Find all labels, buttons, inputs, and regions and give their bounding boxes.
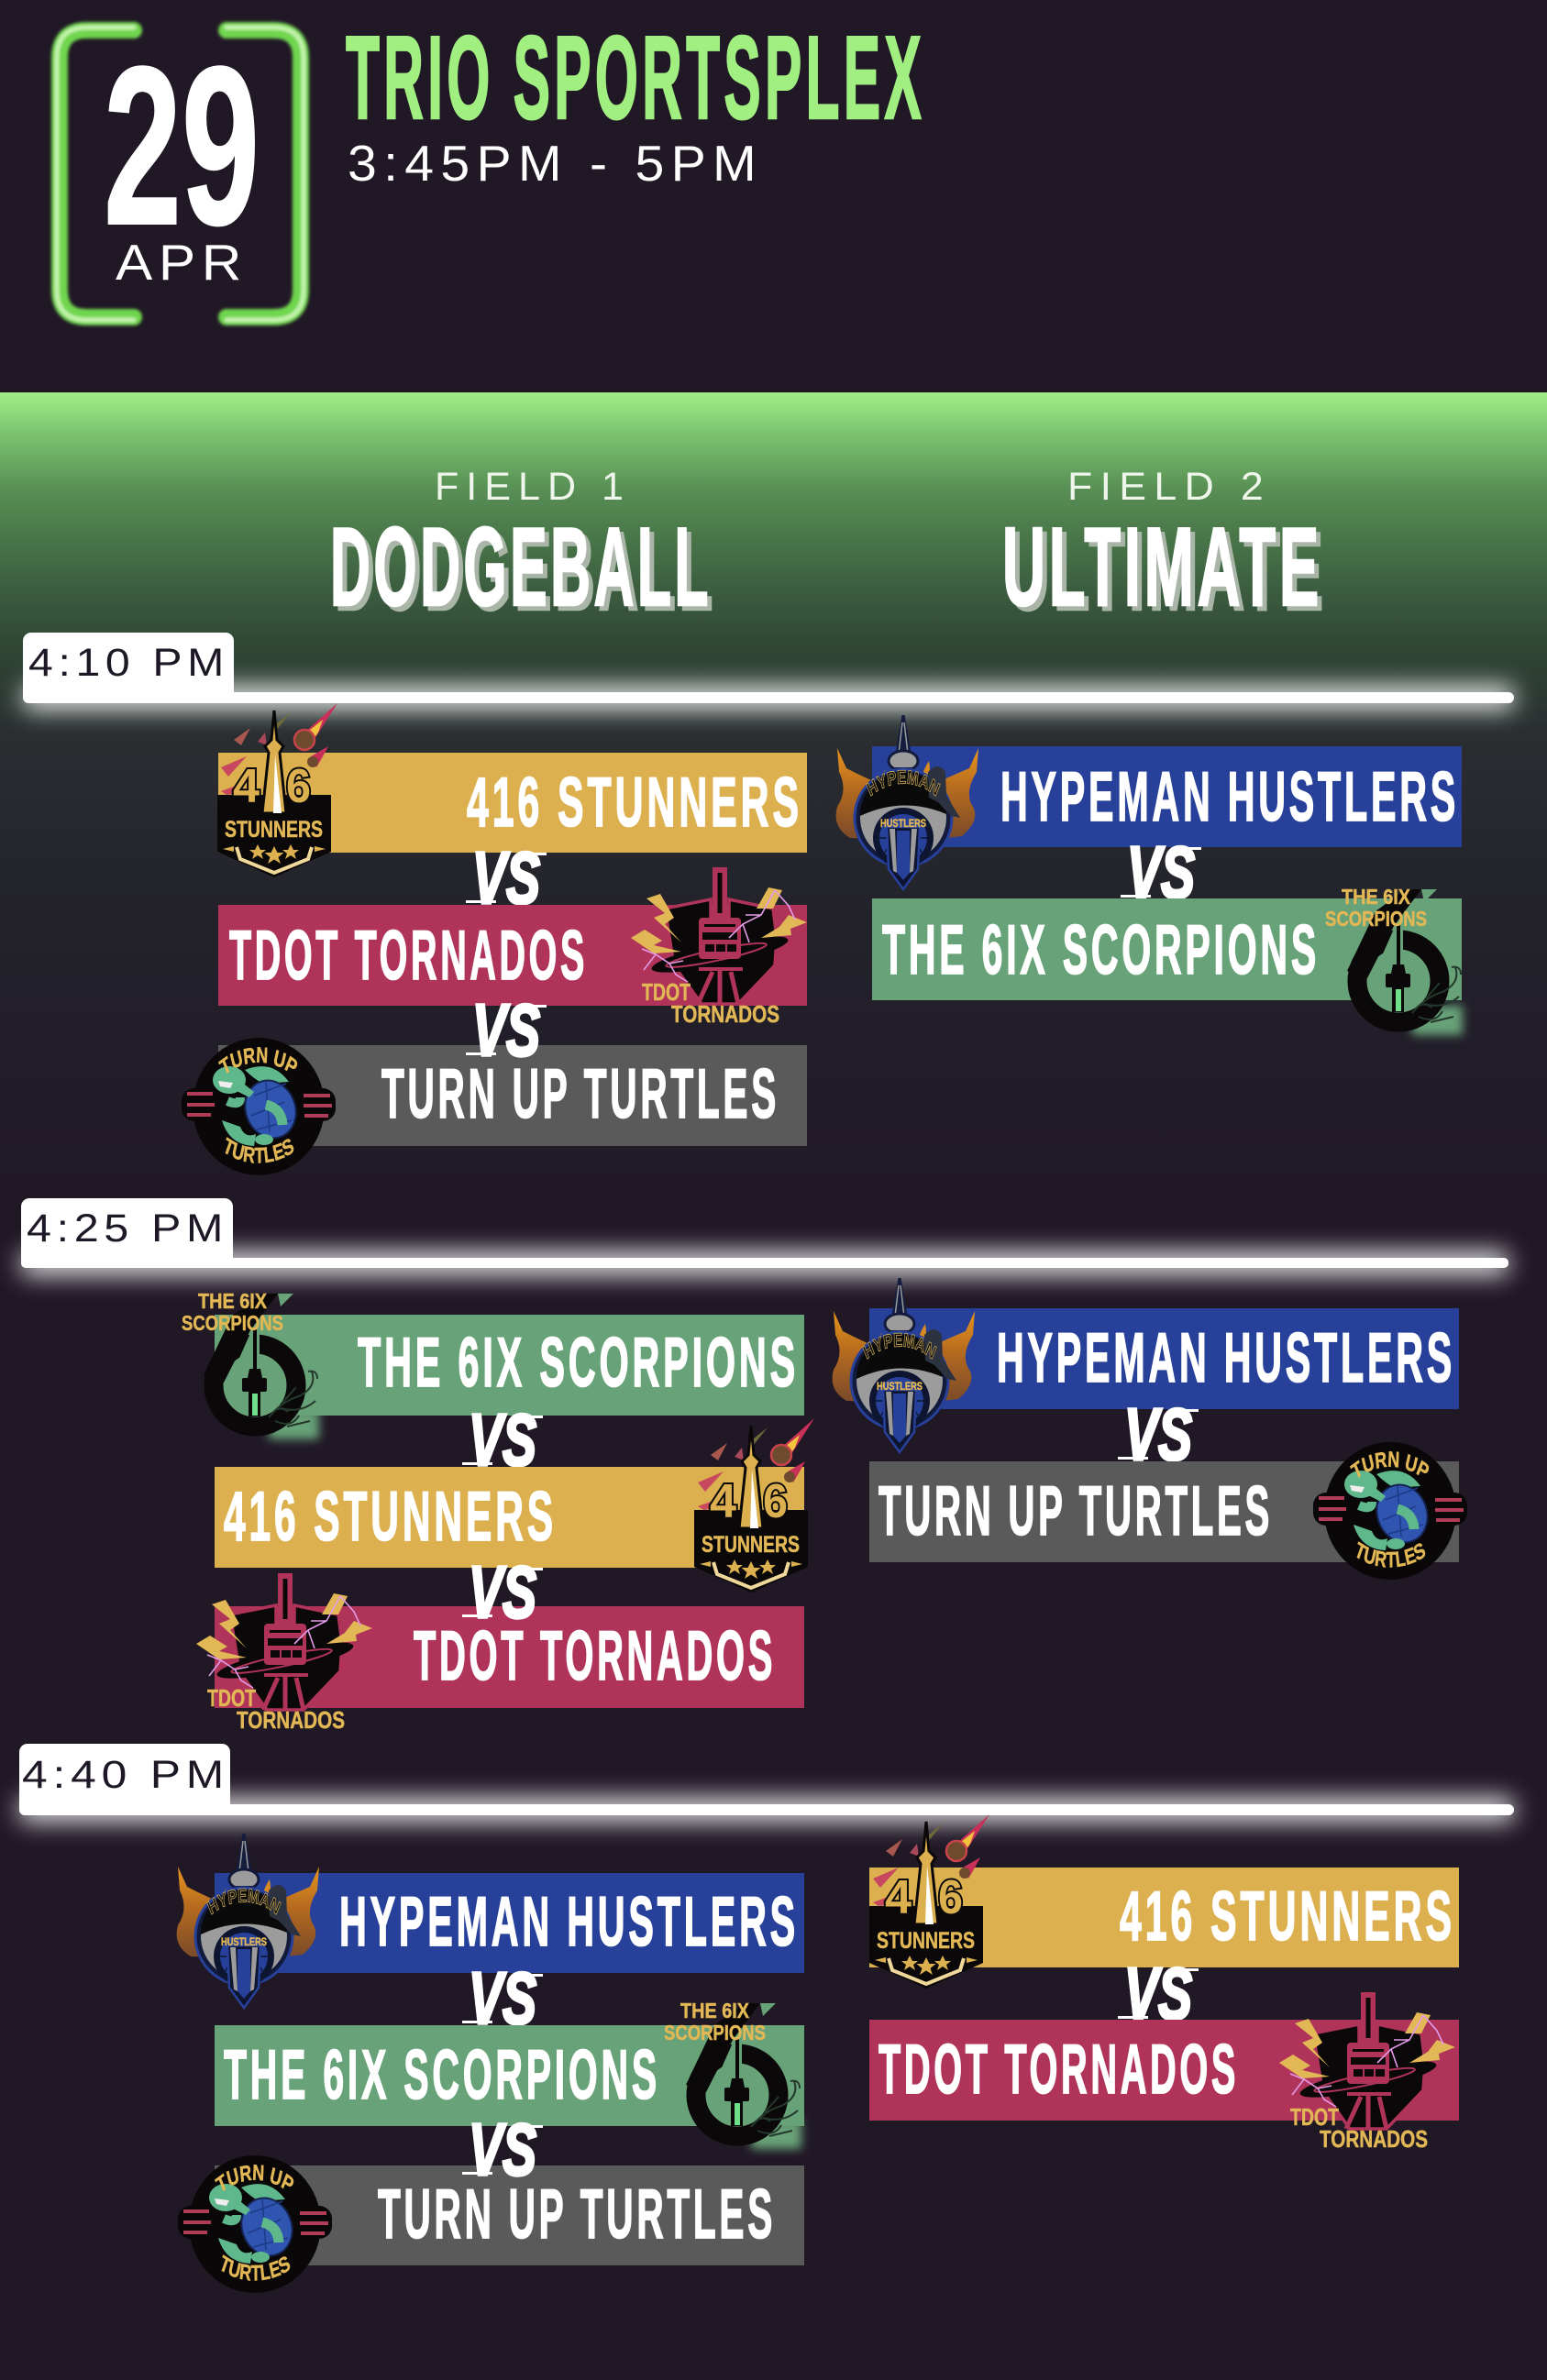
logo: TDOT Tornados: TDOT — [207, 1684, 256, 1712]
logo: 416 Stunners — [217, 703, 337, 877]
logo: Turn Up Turtles — [1313, 1442, 1467, 1580]
logo: The 6ix Scorpions: THE 6IX — [680, 1999, 750, 2022]
logo: The 6ix Scorpions — [1325, 885, 1463, 1035]
bar: Turn Up Turtles: TURN UP TURTLES — [381, 1055, 779, 1133]
logo: Hypeman Hustlers: HUSTLERS — [221, 1935, 267, 1948]
text: DODGEBALL — [335, 509, 716, 634]
bar: 416 Stunners: 416 STUNNERS — [224, 1478, 557, 1556]
logo: TDOT Tornados — [1279, 1992, 1455, 2153]
logo: 416 Stunners: STUNNERS — [225, 817, 323, 843]
logo: 416 Stunners: STUNNERS — [702, 1532, 800, 1558]
logo: Hypeman Hustlers — [836, 715, 978, 891]
logo: 416 Stunners: 4 — [885, 1871, 912, 1924]
logo: Hypeman Hustlers: HUSTLERS — [877, 1380, 923, 1393]
logo: TDOT Tornados: TORNADOS — [237, 1706, 345, 1734]
vs marker: VS — [469, 2109, 536, 2190]
bar: Turn Up Turtles — [218, 1045, 807, 1146]
logo: TDOT Tornados: TORNADOS — [1320, 2125, 1428, 2153]
logo: The 6ix Scorpions: SCORPIONS — [1325, 907, 1427, 931]
logo: TDOT Tornados: TDOT — [1290, 2103, 1339, 2131]
field 1 label: FIELD 1 — [435, 465, 631, 509]
ultimate title — [1002, 504, 1327, 634]
logo: 416 Stunners: STUNNERS — [877, 1928, 975, 1954]
logo: The 6ix Scorpions: THE 6IX — [198, 1289, 268, 1313]
logo: 416 Stunners — [694, 1418, 814, 1592]
logo: Hypeman Hustlers: HUSTLERS — [880, 817, 926, 830]
logo: TDOT Tornados: TDOT — [642, 978, 691, 1006]
logo: The 6ix Scorpions: THE 6IX — [1342, 885, 1411, 909]
logo: 416 Stunners: 6 — [938, 1871, 963, 1924]
logo: Hypeman Hustlers: HYPEMAN — [866, 770, 941, 797]
bar: TDOT Tornados — [218, 905, 807, 1006]
month: APR — [116, 234, 248, 291]
logo: Turn Up Turtles: TURTLES — [222, 2254, 290, 2281]
bar: Hypeman Hustlers — [872, 746, 1462, 847]
vs marker: VS — [469, 1399, 536, 1481]
dodgeball title — [330, 504, 716, 634]
day number: 29 — [104, 20, 260, 272]
vs marker: VS — [1127, 832, 1195, 913]
bar: Hypeman Hustlers — [215, 1873, 804, 1973]
vs marker: VS — [472, 837, 540, 919]
logo: The 6ix Scorpions — [664, 1999, 801, 2149]
field 2 label: FIELD 2 — [1067, 465, 1271, 509]
logo: Hypeman Hustlers: HYPEMAN — [207, 1889, 282, 1915]
time label 4:10 PM: 4:10 PM — [28, 641, 229, 685]
vs marker: VS — [1124, 1953, 1192, 2034]
bar: 416 Stunners — [218, 753, 807, 853]
logo: Turn Up Turtles — [178, 2155, 332, 2293]
time block: 4:10 PM — [6, 633, 1530, 1175]
bar: TDOT Tornados: TDOT TORNADOS — [229, 917, 588, 995]
logo: The 6ix Scorpions — [182, 1289, 319, 1439]
logo: 416 Stunners: 6 — [286, 760, 311, 813]
bar: 416 Stunners — [869, 1868, 1459, 1967]
bar: Hypeman Hustlers — [869, 1308, 1459, 1409]
logo: TDOT Tornados — [631, 867, 807, 1028]
logo: Hypeman Hustlers — [833, 1278, 975, 1454]
vs marker: VS — [472, 989, 540, 1071]
logo: The 6ix Scorpions: SCORPIONS — [664, 2021, 766, 2044]
logo: The 6ix Scorpions: SCORPIONS — [182, 1311, 283, 1335]
neon bracket frame — [57, 28, 304, 320]
logo: Turn Up Turtles — [182, 1038, 336, 1175]
time label 4:40 PM: 4:40 PM — [22, 1753, 229, 1797]
logo: TDOT Tornados — [196, 1573, 372, 1734]
logo: 416 Stunners: 6 — [763, 1475, 788, 1528]
time block: 4:40 PM — [2, 1744, 1531, 2293]
logo: Hypeman Hustlers: HYPEMAN — [862, 1333, 937, 1360]
bar: Hypeman Hustlers: HYPEMAN HUSTLERS — [339, 1883, 799, 1961]
panel: green gradient band — [0, 392, 1547, 1210]
time label 4:25 PM: 4:25 PM — [27, 1207, 228, 1251]
date badge — [57, 20, 304, 320]
field 2 heading — [1002, 465, 1327, 634]
vs marker: VS — [469, 1551, 536, 1633]
time block: 4:25 PM — [4, 1198, 1526, 1734]
logo: 416 Stunners: 4 — [710, 1475, 736, 1528]
logo: Turn Up Turtles: TURN UP — [1350, 1451, 1429, 1478]
text: TRIO SPORTSPLEX — [346, 12, 925, 144]
logo: Turn Up Turtles: TURN UP — [215, 2165, 293, 2191]
bar: TDOT Tornados — [215, 1606, 804, 1708]
logo: 416 Stunners: 4 — [233, 760, 260, 813]
field 1 heading — [330, 465, 716, 634]
bar: The 6ix Scorpions: THE 6IX SCORPIONS — [224, 2036, 660, 2114]
bar: TDOT Tornados: TDOT TORNADOS — [414, 1617, 776, 1695]
vs marker: VS — [1124, 1394, 1192, 1475]
bar: The 6ix Scorpions — [872, 898, 1462, 1000]
bar: Turn Up Turtles — [215, 2165, 804, 2265]
bar: The 6ix Scorpions — [215, 2025, 804, 2126]
bar: Turn Up Turtles: TURN UP TURTLES — [378, 2176, 776, 2253]
dodgeball title: DODGEBALL — [330, 504, 712, 629]
glowing timeline 4:25 — [21, 1198, 1508, 1275]
logo: Turn Up Turtles: TURTLES — [1357, 1541, 1425, 1568]
bar: The 6ix Scorpions — [215, 1315, 804, 1416]
glowing timeline 4:40 — [19, 1744, 1514, 1822]
logo: Hypeman Hustlers — [176, 1834, 319, 2010]
bar: 416 Stunners: 416 STUNNERS — [467, 764, 802, 842]
glowing timeline 4:10 — [23, 633, 1514, 710]
bar: The 6ix Scorpions: THE 6IX SCORPIONS — [358, 1324, 799, 1402]
logo: 416 Stunners — [869, 1814, 989, 1989]
logo: Turn Up Turtles: TURN UP — [218, 1047, 297, 1074]
logo: TDOT Tornados: TORNADOS — [671, 1000, 779, 1028]
logo: Turn Up Turtles: TURTLES — [226, 1137, 293, 1163]
bar: TDOT Tornados — [869, 2020, 1459, 2121]
vs marker: VS — [469, 1957, 536, 2039]
bar: Turn Up Turtles — [869, 1461, 1459, 1562]
event time range: 3:45PM - 5PM — [348, 135, 763, 192]
